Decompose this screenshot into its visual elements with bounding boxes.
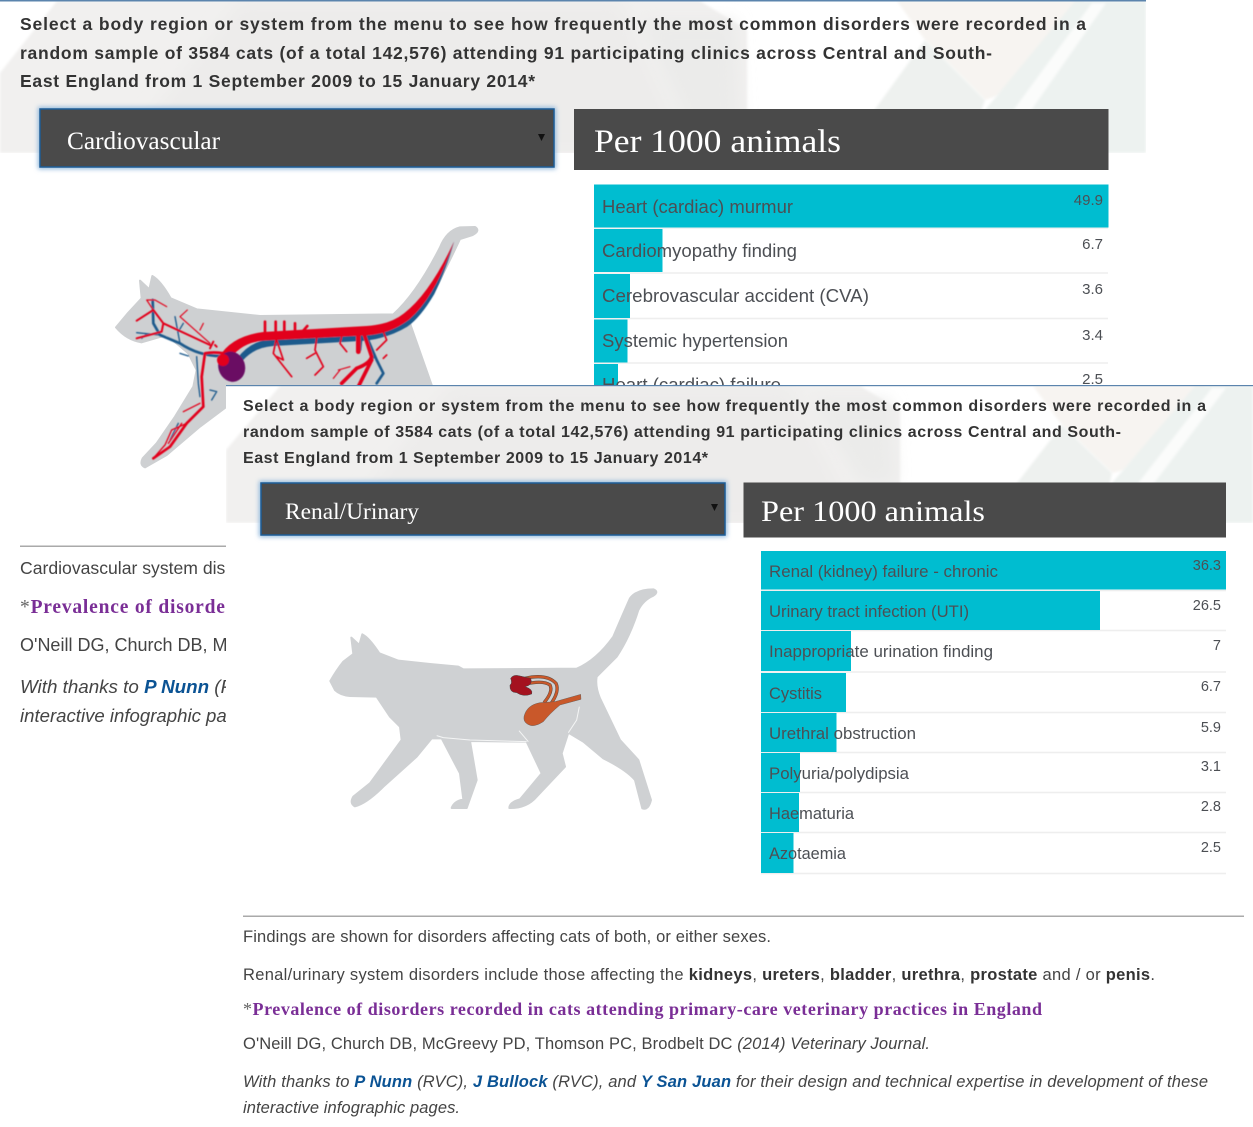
bars <box>761 551 1226 873</box>
labels: Urinary tract infection (UTI) <box>769 602 969 621</box>
footnotes, partly covered: O'Neill DG, Church DB, McGreevy PD <box>20 635 324 655</box>
footnotes, partly covered <box>20 546 353 726</box>
values: 2.8 <box>1201 799 1221 815</box>
note: renal system: Renal/urinary system disorders include those affecting the kidneys, ureters, bladder, urethra, prostate and / or penis. <box>243 966 1155 984</box>
values: 36.3 <box>1193 558 1221 574</box>
intro text: random sample of 3584 cats (of a total 142,576) attending 91 participating clinics across Central and South- <box>243 424 1121 441</box>
heading: Per 1000 animals: Per 1000 animals <box>594 124 841 160</box>
heading: Per 1000 animals <box>574 109 1108 170</box>
row dividers <box>594 228 1108 363</box>
values <box>1193 558 1221 856</box>
footnotes <box>243 916 1244 1117</box>
labels: Systemic hypertension <box>602 331 788 351</box>
intro text: Select a body region or system from the menu to see how frequently the most common disorders were recorded in a <box>243 398 1206 415</box>
values: 2.5 <box>1082 371 1103 388</box>
intro text: East England from 1 September 2009 to 15 January 2014* <box>20 71 535 91</box>
footnotes, partly covered: interactive infographic pages. <box>20 705 262 726</box>
intro text: random sample of 3584 cats (of a total 142,576) attending 91 participating clinics across Central and South- <box>20 43 992 63</box>
bar chart: renal/urinary disorders <box>761 551 1226 874</box>
vessels <box>137 242 454 458</box>
ureters <box>525 677 557 705</box>
footnotes, partly covered: Cardiovascular system disorders <box>20 558 275 578</box>
values <box>1074 192 1103 388</box>
intro text: Select a body region or system from the menu to see how frequently the most common disorders were recorded in a <box>20 14 1086 34</box>
labels <box>602 197 869 395</box>
bar chart: cardiovascular disorders <box>594 184 1108 395</box>
values: 6.7 <box>1201 679 1221 695</box>
cat silhouette <box>330 589 656 809</box>
kidneys <box>510 675 532 695</box>
main vein <box>237 242 454 361</box>
intro text <box>20 14 1086 91</box>
bladder and urethra <box>524 694 581 726</box>
acknowledgements: With thanks to P Nunn (RVC), J Bullock (RVC), and Y San Juan for their design and technical expertise in development of these <box>243 1073 1208 1091</box>
values: 3.4 <box>1082 327 1103 344</box>
values: 2.5 <box>1201 840 1221 856</box>
panel white base <box>226 385 1253 1127</box>
labels: Renal (kidney) failure - chronic <box>769 562 998 581</box>
cat illustration: cardiovascular <box>116 227 477 467</box>
labels: Urethral obstruction <box>769 724 916 743</box>
panel: renal/urinary view <box>226 385 1253 1127</box>
footnotes, partly covered: *Prevalence of disorders recorded <box>20 597 330 618</box>
arteries <box>137 300 387 458</box>
main artery <box>219 242 454 362</box>
values: 7 <box>1213 638 1221 654</box>
source title: *Prevalence of disorders recorded in cats attending primary-care veterinary practices in England <box>243 999 1042 1019</box>
dropdown: Renal/Urinary <box>259 481 727 537</box>
intro text: East England from 1 September 2009 to 15 January 2014* <box>243 450 709 467</box>
labels: Cerebrovascular accident (CVA) <box>602 286 869 306</box>
heart <box>214 348 249 385</box>
bars <box>594 184 1108 389</box>
cat silhouette <box>116 227 477 467</box>
values: 49.9 <box>1074 192 1103 209</box>
labels: Inappropriate urination finding <box>769 642 993 661</box>
panel: cardiovascular view <box>0 0 1146 726</box>
heading: Per 1000 animals <box>744 482 1226 538</box>
row dividers <box>761 590 1226 874</box>
panel background photo <box>226 386 1253 523</box>
top rule <box>226 385 1253 386</box>
note: sexes: Findings are shown for disorders affecting cats of both, or either sexes. <box>243 928 771 946</box>
dropdown: Cardiovascular: Cardiovascular <box>67 128 221 155</box>
labels: Heart (cardiac) murmur <box>602 197 793 217</box>
labels <box>769 562 998 863</box>
values: 6.7 <box>1082 236 1103 253</box>
intro text <box>243 398 1206 467</box>
veins <box>137 300 383 440</box>
belly highlights <box>437 707 579 742</box>
labels: Azotaemia <box>769 844 847 863</box>
dropdown: Renal/Urinary: Renal/Urinary <box>285 499 419 524</box>
values: 3.6 <box>1082 281 1103 298</box>
footnotes: interactive infographic pages. <box>243 1099 460 1117</box>
citation: O'Neill DG, Church DB, McGreevy PD, Thomson PC, Brodbelt DC (2014) Veterinary Journal. <box>243 1035 930 1053</box>
values: 5.9 <box>1201 720 1221 736</box>
labels: Cardiomyopathy finding <box>602 241 797 261</box>
labels: Haematuria <box>769 804 855 823</box>
labels: Cystitis <box>769 684 822 703</box>
heading: Per 1000 animals: Per 1000 animals <box>761 495 985 528</box>
panel background photo <box>0 1 1146 153</box>
footnotes, partly covered: With thanks to P Nunn (RVC), J Bullock <box>20 676 353 697</box>
labels: Polyuria/polydipsia <box>769 764 910 783</box>
cat illustration: urinary system <box>330 589 656 809</box>
labels: Heart (cardiac) failure <box>602 375 781 395</box>
values: 26.5 <box>1193 598 1221 614</box>
dropdown: Cardiovascular <box>38 107 556 169</box>
values: 3.1 <box>1201 759 1221 775</box>
top rule <box>0 0 1146 2</box>
